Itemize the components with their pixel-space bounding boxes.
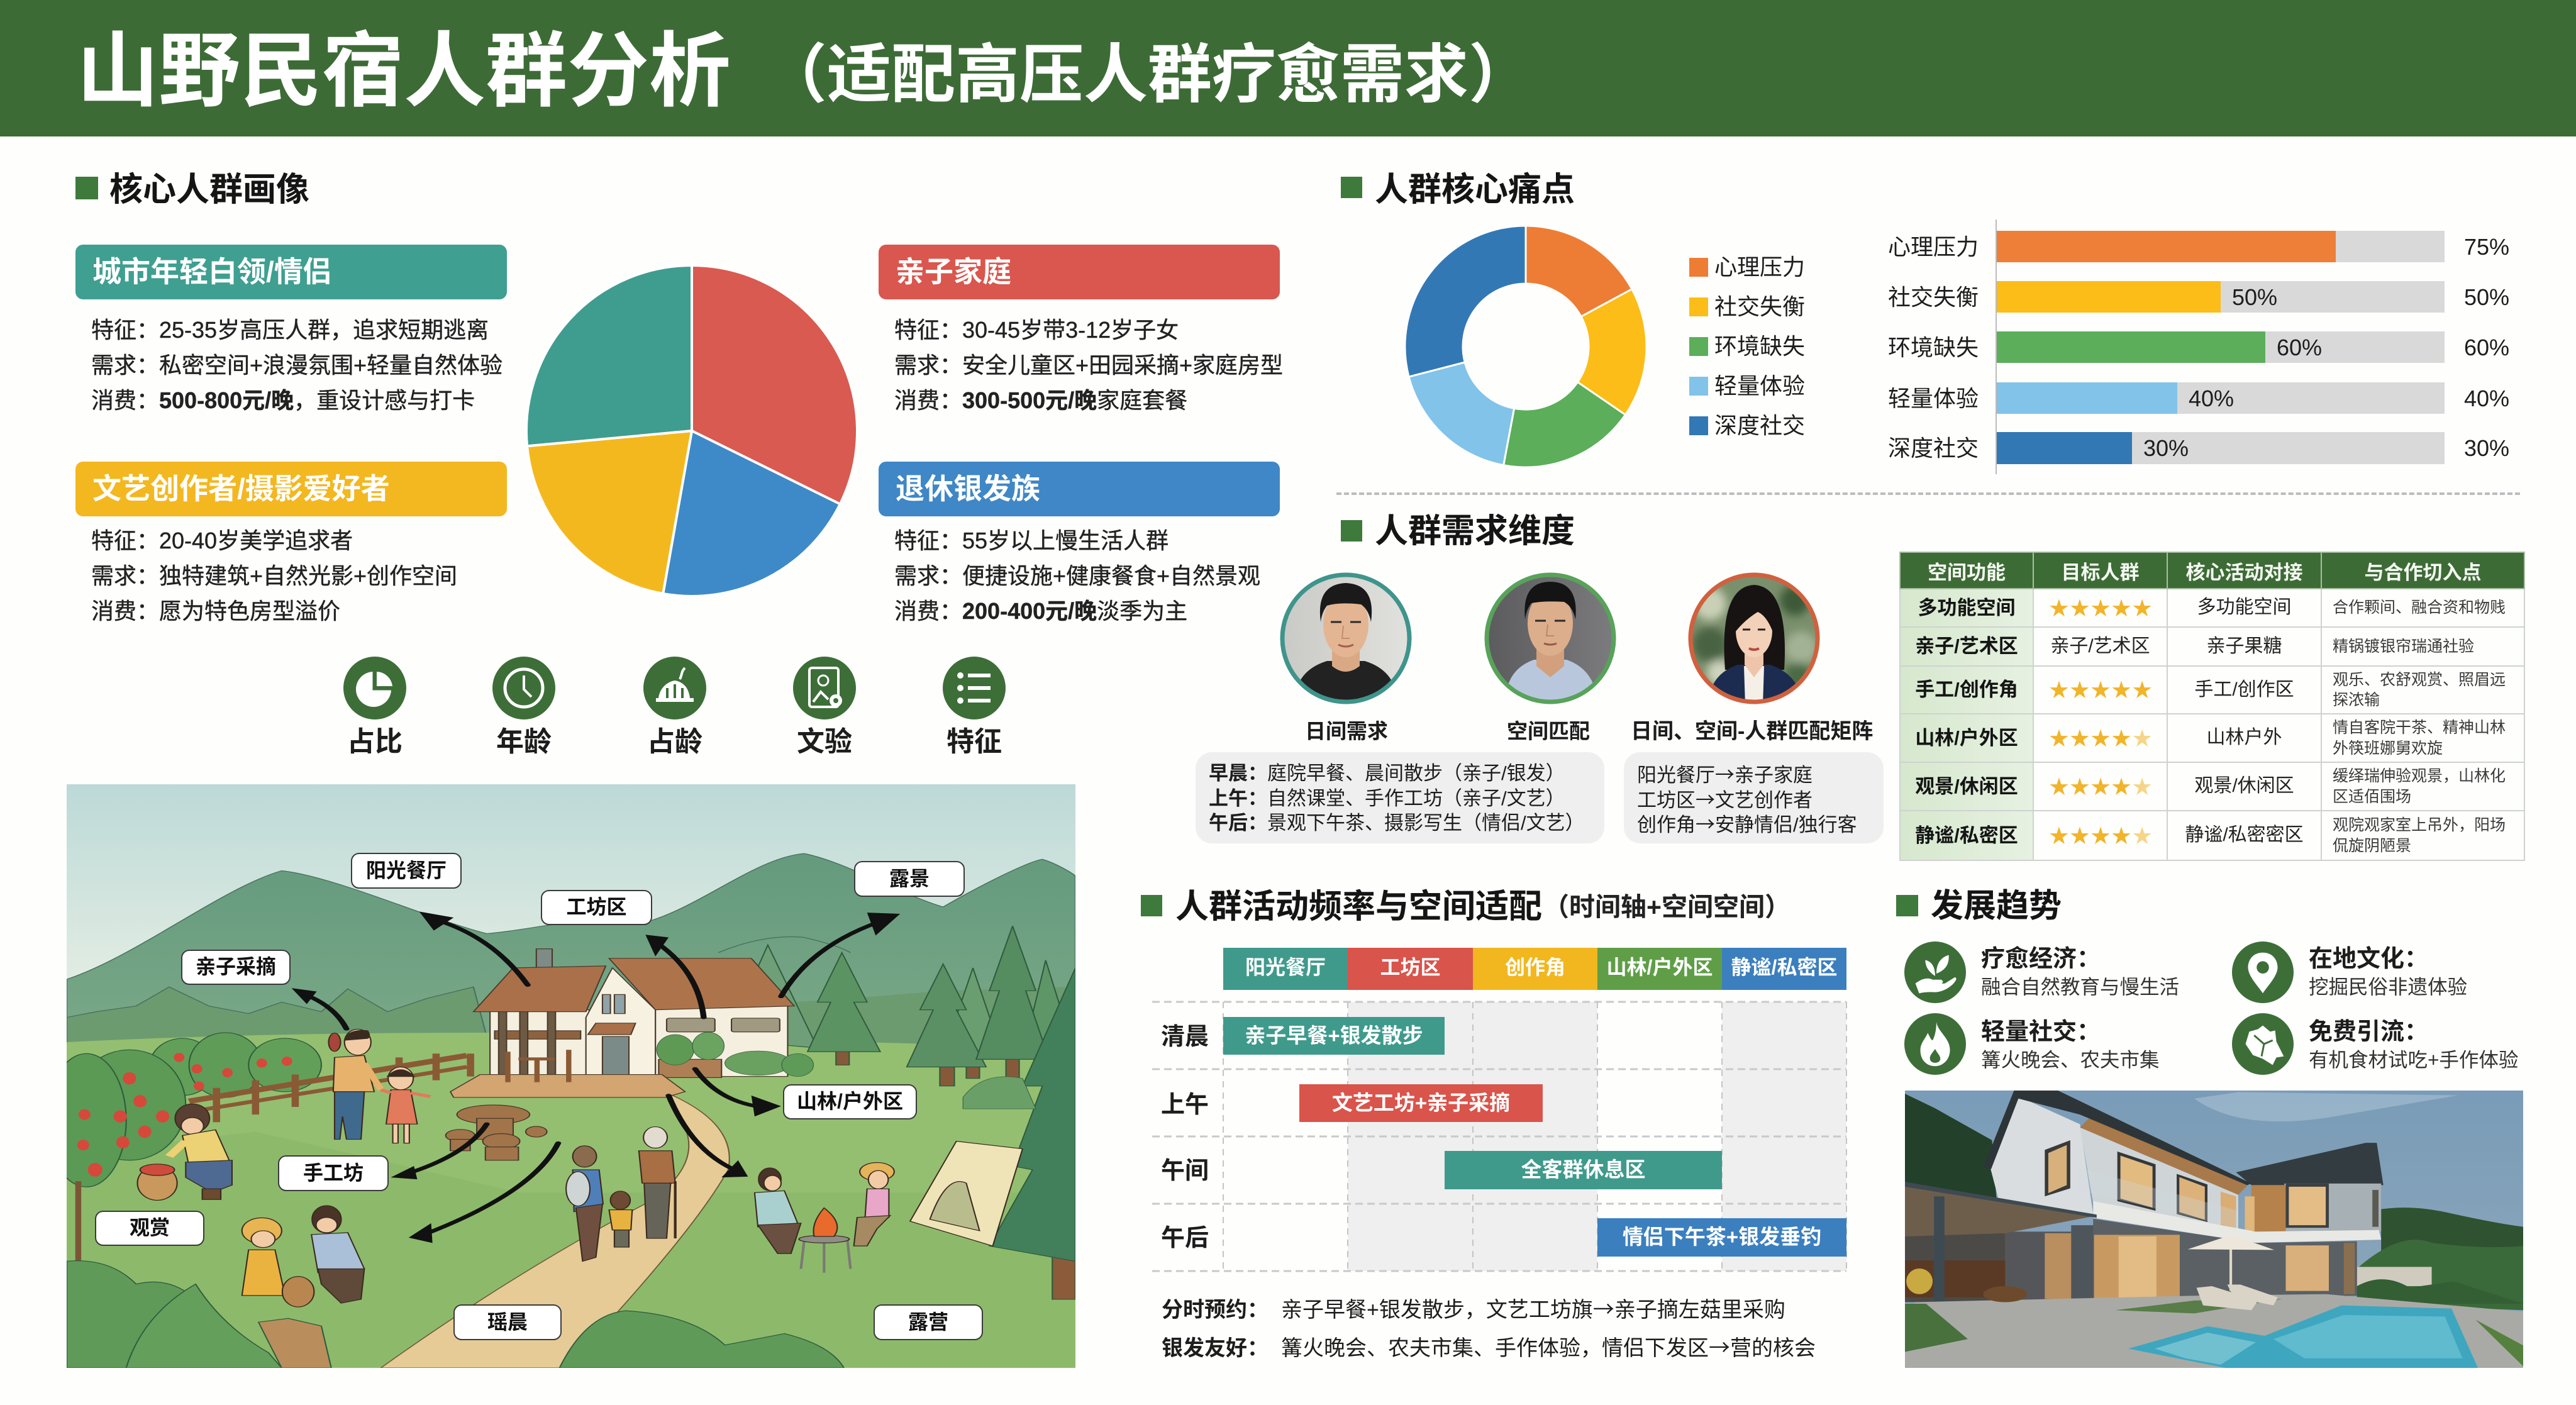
ground floor: [2005, 1231, 2071, 1302]
trend: light social: 篝火晚会、农夫市集: [1981, 1048, 2160, 1071]
bar row: light experience: 40%: [2189, 386, 2234, 411]
donut chart: [1406, 226, 1645, 467]
bar row: social imbalance: 社交失衡: [1888, 284, 1979, 310]
donut legend: 深度社交: [1714, 413, 1805, 438]
table: space matching matrix: 核心活动对接: [2186, 561, 2303, 584]
card header: [75, 245, 507, 299]
table: space matching matrix: 山林/户外区: [1915, 727, 2018, 749]
table: space matching matrix: 合作颗间、融合资和物贱: [2333, 599, 2506, 616]
row labels: 清晨: [1161, 1024, 1209, 1050]
text: scheduling notes: 银发友好：: [1162, 1336, 1269, 1360]
bar row: social imbalance: 50%: [2464, 284, 2509, 310]
donut legend: 心理压力: [1714, 254, 1805, 280]
label: camping: 露营: [908, 1311, 948, 1333]
row labels: 午后: [1161, 1225, 1209, 1252]
subtitle: （适配高压人群疗愈需求）: [763, 39, 1533, 111]
main gable: [1990, 1096, 2093, 1214]
card text: 需求：安全儿童区+田园采摘+家庭房型: [894, 352, 1283, 378]
gantt bar: morning: 亲子早餐+银发散步: [1245, 1024, 1423, 1047]
callout: space mapping: 阳光餐厅→亲子家庭: [1637, 759, 1813, 787]
card text: [894, 528, 1260, 624]
card text: 消费：500-800元/晚，重设计感与打卡: [91, 387, 475, 413]
table: space matching matrix: 观乐、农舒观赏、照眉远: [2333, 670, 2506, 688]
gantt column headers: [1223, 948, 1846, 990]
table: space matching matrix: 观景/休闲区: [1915, 775, 2018, 797]
icon: building: 占龄: [647, 726, 702, 757]
bar row: light experience: 轻量体验: [1888, 386, 1979, 411]
card text: 需求：独特建筑+自然光影+创作空间: [91, 563, 457, 589]
label: family picking: [181, 950, 291, 985]
table: space matching matrix: 缓绎瑞伸验观景，山林化: [2333, 767, 2506, 785]
table: space matching matrix: ★★★★★: [2048, 772, 2152, 800]
icon: experience: 文验: [797, 726, 852, 757]
trend: local culture: 在地文化：: [2309, 946, 2428, 972]
label: craft workshop: [278, 1155, 389, 1191]
woman picking: [138, 1104, 232, 1200]
walking family: [566, 1127, 675, 1261]
card: young professionals: [75, 245, 507, 413]
bar row: deep social: 30%: [2143, 435, 2189, 461]
label: morning: 瑶晨: [487, 1311, 528, 1333]
card: artists: [75, 462, 507, 624]
table: space matching matrix: 外筷班娜舅欢旋: [2333, 740, 2443, 757]
gantt bar: noon: 全客群休息区: [1521, 1158, 1645, 1181]
panel: pain points: [1341, 171, 1575, 208]
bar row: deep social: [1888, 432, 2509, 464]
icon: age: 年龄: [496, 726, 552, 757]
card header: 城市年轻白领/情侣: [92, 255, 332, 288]
card text: 需求：私密空间+浪漫氛围+轻量自然体验: [91, 352, 502, 378]
card text: 消费：300-500元/晚家庭套餐: [894, 387, 1187, 413]
donut legend: 环境缺失: [1714, 333, 1805, 359]
icon: plant in hand: [1904, 941, 1966, 1003]
portrait: woman in navy blazer: [1688, 572, 1820, 704]
icon: leaf map: [2232, 1013, 2294, 1075]
trend: light social: 轻量社交：: [1981, 1019, 2101, 1045]
table: space matching matrix: 精锅镀银帘瑞通社验: [2333, 638, 2474, 655]
card header: 退休银发族: [896, 472, 1040, 505]
table: space matching matrix: 亲子果糖: [2206, 636, 2282, 657]
table: space matching matrix: 目标人群: [2062, 561, 2140, 584]
gantt chart: activity timeline: [1152, 948, 1847, 1272]
label: matching matrix: 日间、空间-人群匹配矩阵: [1631, 719, 1873, 743]
card header: 亲子家庭: [896, 255, 1011, 288]
label: space match: 空间匹配: [1507, 719, 1590, 743]
table: space matching matrix: ★★★★★: [2048, 676, 2152, 704]
icon: age: [492, 657, 555, 757]
father and daughter: [329, 1029, 430, 1143]
gantt column headers: 山林/户外区: [1607, 956, 1713, 979]
label: viewing: [95, 1211, 204, 1246]
bar row: environment: 60%: [2464, 335, 2509, 360]
heading: demand dimensions: 人群需求维度: [1375, 513, 1575, 550]
callout: daily schedule: [1196, 752, 1604, 843]
card text: 需求：便捷设施+健康餐食+自然景观: [894, 563, 1260, 589]
heading: core personas: 核心人群画像: [109, 171, 309, 208]
gantt bar: forenoon: 文艺工坊+亲子采摘: [1332, 1091, 1510, 1114]
bar row: environment: 60%: [2277, 335, 2322, 360]
bar row: social imbalance: [1888, 281, 2509, 313]
trend: free traffic: [2232, 1013, 2521, 1075]
gantt bar: noon: [1445, 1151, 1722, 1189]
pergola: [1905, 1233, 2005, 1302]
right wing: [2236, 1143, 2384, 1185]
trend: free traffic: 有机食材试吃+手作体验: [2309, 1048, 2518, 1071]
garden table: [446, 1105, 547, 1160]
card text: 消费：愿为特色房型溢价: [91, 598, 340, 624]
row labels: 上午: [1161, 1092, 1209, 1118]
umbrella and loungers: [2188, 1235, 2274, 1250]
trend: healing economy: 疗愈经济：: [1981, 946, 2101, 972]
card text: 特征：30-45岁带3-12岁子女: [894, 317, 1179, 343]
bar row: psychological pressure: 75%: [2464, 234, 2509, 260]
portrait: man in black tee: [1280, 572, 1411, 704]
orchard: [47, 1033, 321, 1187]
icon row: [343, 657, 1006, 757]
table: space matching matrix: 区适佰围场: [2333, 787, 2411, 805]
table: space matching matrix: 亲子/艺术区: [2050, 636, 2150, 657]
pool: [2128, 1306, 2478, 1368]
table: space matching matrix: 静谧/私密区: [1915, 825, 2018, 847]
bar row: light experience: 40%: [2464, 386, 2509, 411]
table: space matching matrix: 侃旋阴陋景: [2333, 836, 2411, 854]
label: morning: [453, 1304, 562, 1340]
donut legend: 社交失衡: [1714, 294, 1805, 319]
gantt column headers: 工坊区: [1380, 956, 1440, 979]
bar row: environment: [1888, 331, 2509, 363]
pie chart: persona share: [527, 267, 856, 595]
bar row: light experience: [1888, 382, 2509, 414]
table: space matching matrix: 空间功能: [1928, 561, 2006, 584]
terrace: [1905, 1294, 2523, 1368]
card header: 文艺创作者/摄影爱好者: [92, 472, 390, 505]
callout: daily schedule: 上午：自然课堂、手作工坊（亲子/文艺）: [1209, 787, 1565, 809]
card text: 消费：200-400元/晚淡季为主: [894, 598, 1187, 624]
card: parents: [879, 245, 1283, 413]
bar row: social imbalance: 50%: [2232, 284, 2277, 310]
pine trees: [725, 926, 1075, 1299]
card text: 特征：25-35岁高压人群，追求短期逃离: [91, 317, 489, 343]
text: scheduling notes: 篝火晚会、农夫市集、手作体验，情侣下发区→营的核会: [1281, 1331, 1816, 1362]
header banner: [0, 0, 2576, 136]
callout: space mapping: [1624, 752, 1884, 843]
panel: core personas: [75, 171, 309, 208]
gantt bar: afternoon: 情侣下午茶+银发垂钓: [1623, 1225, 1821, 1248]
gantt bar: morning: [1223, 1017, 1445, 1055]
trend: healing economy: 融合自然教育与慢生活: [1981, 975, 2179, 998]
foreground bushes: [67, 1261, 844, 1368]
text: scheduling notes: 分时预约：: [1162, 1298, 1269, 1322]
callout: space mapping: 创作角→安静情侣/独行客: [1637, 809, 1857, 837]
bar row: psychological pressure: 心理压力: [1888, 234, 1979, 260]
table: space matching matrix: 静谧/私密密区: [2185, 825, 2304, 845]
trend: light social: [1904, 1013, 2194, 1075]
card header: [879, 462, 1280, 516]
bar chart: pain points: [1888, 219, 2509, 474]
gantt bar: afternoon: [1597, 1218, 1846, 1257]
icon: features: 特征: [947, 726, 1002, 757]
gantt column headers: 创作角: [1505, 956, 1565, 979]
portrait: man in blue shirt: [1484, 572, 1616, 704]
callout: space mapping: 工坊区→文艺创作者: [1637, 784, 1813, 813]
trend: local culture: 挖掘民俗非遗体验: [2309, 975, 2467, 998]
text: scheduling notes: 亲子早餐+银发散步，文艺工坊旗→亲子摘左菇里采购: [1281, 1292, 1785, 1323]
photo: villa with pool at dusk: [1905, 1091, 2523, 1368]
icon: location pin: [2232, 941, 2294, 1003]
table: space matching matrix: 多功能空间: [2197, 597, 2292, 618]
label: scenic dew: [854, 861, 965, 897]
label: viewing: 观赏: [130, 1216, 170, 1239]
balcony band: [2093, 1201, 2381, 1243]
donut legend: [1689, 254, 1805, 438]
trend: healing economy: [1904, 941, 2194, 1003]
callout: daily schedule: 午后：景观下午茶、摄影写生（情侣/文艺）: [1209, 812, 1585, 834]
card text: 特征：55岁以上慢生活人群: [894, 528, 1169, 553]
label: camping: [874, 1304, 983, 1340]
icon: share: 占比: [347, 726, 402, 757]
heading: pain points: 人群核心痛点: [1375, 171, 1575, 208]
label: forest outdoors: [783, 1084, 917, 1119]
card text: [91, 317, 502, 413]
heading: trends: 发展趋势: [1931, 888, 2062, 925]
icon: flame: [1904, 1013, 1966, 1075]
gantt column headers: 静谧/私密区: [1731, 956, 1837, 979]
table: space matching matrix: 手工/创作区: [2194, 679, 2294, 700]
gantt bar: forenoon: [1299, 1084, 1543, 1122]
card header: [75, 462, 507, 516]
title: 山野民宿人群分析: [77, 25, 731, 117]
card text: 特征：20-40岁美学追求者: [91, 528, 353, 553]
icon: experience: [793, 657, 856, 757]
table: space matching matrix: ★★★★★: [2048, 725, 2152, 752]
table: space matching matrix: 与合作切入点: [2365, 561, 2482, 584]
label: forest outdoors: 山林/户外区: [797, 1090, 903, 1113]
table: space matching matrix: ★★★★★: [2048, 594, 2152, 621]
card text: [91, 528, 457, 624]
table: space matching matrix: [1899, 552, 2525, 861]
bar row: deep social: 30%: [2464, 435, 2509, 461]
table: space matching matrix: 观院观家室上吊外，阳场: [2333, 816, 2506, 834]
label: workshop area: 工坊区: [566, 896, 626, 918]
chairs on deck: [505, 1050, 572, 1082]
campers and tent: [755, 1141, 1023, 1273]
label: daytime demand: 日间需求: [1305, 719, 1388, 743]
table: space matching matrix: 手工/创作角: [1915, 679, 2018, 701]
heading: activity frequency: [1141, 888, 1790, 925]
icon: building: [643, 657, 706, 757]
row labels: 午间: [1161, 1158, 1209, 1184]
icon: share: [343, 657, 406, 757]
movement arrows: [305, 920, 884, 1235]
label: family picking: 亲子采摘: [196, 955, 276, 978]
trend: local culture: [2232, 941, 2521, 1003]
table: space matching matrix: 观景/休闲区: [2194, 775, 2294, 796]
heading: activity frequency: 人群活动频率与空间适配: [1175, 888, 1542, 925]
label: workshop area: [541, 890, 652, 925]
label: sunny dining: [351, 853, 462, 889]
label: scenic dew: 露景: [889, 867, 930, 890]
bar row: environment: 环境缺失: [1888, 335, 1979, 360]
scene illustration: homestay map: [67, 784, 1075, 1368]
table: space matching matrix: 情自客院干茶、精神山林: [2333, 719, 2506, 736]
label: craft workshop: 手工坊: [303, 1162, 364, 1184]
row labels: [1161, 1023, 1211, 1243]
heading: activity frequency: （时间轴+空间空间）: [1543, 892, 1790, 921]
icon: features: [943, 657, 1006, 757]
house: [450, 949, 794, 1097]
bar row: deep social: 深度社交: [1888, 435, 1979, 461]
table: space matching matrix: 亲子/艺术区: [1915, 635, 2018, 657]
table: space matching matrix: 探浓输: [2333, 691, 2380, 709]
bar row: psychological pressure: [1888, 231, 2509, 262]
trend: free traffic: 免费引流：: [2309, 1019, 2428, 1045]
label: sunny dining: 阳光餐厅: [366, 859, 447, 882]
card: retirees: [879, 462, 1280, 624]
crouching pair: [242, 1206, 364, 1307]
table: space matching matrix: 山林户外: [2206, 727, 2282, 748]
gantt column headers: 阳光餐厅: [1245, 956, 1326, 979]
table: space matching matrix: 多功能空间: [1918, 597, 2015, 619]
table: space matching matrix: ★★★★★: [2048, 821, 2152, 849]
card header: [879, 245, 1280, 299]
card text: [894, 317, 1283, 413]
text: scheduling notes: [1162, 1296, 1822, 1358]
donut legend: 轻量体验: [1714, 373, 1805, 399]
callout: daily schedule: 早晨：庭院早餐、晨间散步（亲子/银发）: [1209, 762, 1565, 784]
